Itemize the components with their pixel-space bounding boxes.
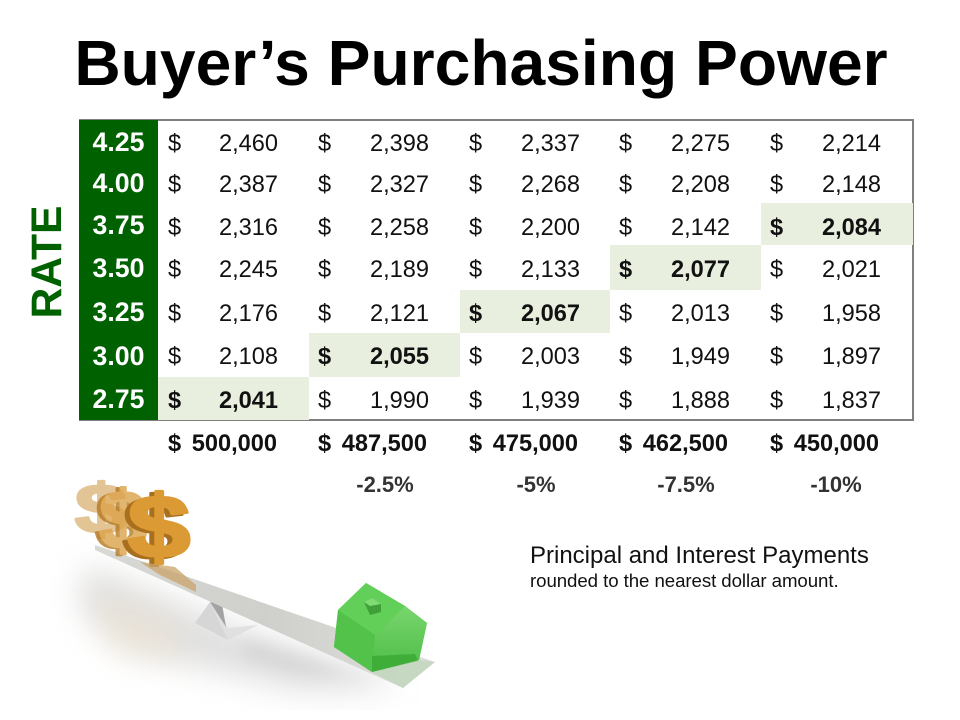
- row 3.00: 1,949: [671, 344, 730, 370]
- row 3.50: $: [469, 256, 482, 282]
- row 4.25: $: [619, 131, 632, 157]
- icon: green house: [334, 583, 435, 688]
- dollar reflection: [140, 562, 196, 592]
- row 4.25: $: [770, 131, 783, 157]
- row 3.00: 1,897: [822, 344, 881, 370]
- row 4.00: 2,387: [219, 172, 278, 198]
- row 4.00: $: [168, 172, 181, 198]
- row 3.50: $: [318, 256, 331, 282]
- home prices row: [168, 431, 879, 457]
- row 3.75: $: [168, 215, 181, 241]
- home prices row: 487,500: [342, 431, 427, 457]
- row 3.75: 2,200: [521, 215, 580, 241]
- row 4.25: $: [168, 131, 181, 157]
- icon: dollar signs: $: [128, 479, 190, 576]
- ground shadow: [80, 565, 400, 690]
- icon: dollar signs: $: [75, 470, 127, 548]
- row 3.50: 2,077: [671, 256, 730, 282]
- row 2.75: 1,990: [370, 388, 429, 414]
- row 4.25: 2,460: [219, 131, 278, 157]
- row 3.50: $: [770, 256, 783, 282]
- row 3.25: [79, 290, 881, 333]
- price change percentages: -10%: [810, 472, 862, 497]
- row 3.00: $: [168, 344, 181, 370]
- row 3.50: $: [619, 256, 632, 282]
- row 3.50: 2,021: [822, 256, 881, 282]
- row 3.50: 2,133: [521, 256, 580, 282]
- row 3.75: $: [469, 215, 482, 241]
- row 3.25: 1,958: [822, 300, 881, 326]
- row 3.75: $: [318, 215, 331, 241]
- home prices row: $: [469, 431, 482, 457]
- row 3.00: [79, 333, 881, 377]
- illustration: scale with dollars and house: [72, 470, 435, 700]
- row 3.75: 2,258: [370, 215, 429, 241]
- row 3.00: 3.00: [93, 340, 144, 370]
- note: principal and interest: [530, 542, 869, 591]
- row 4.00: $: [619, 172, 632, 198]
- row 4.00: 2,268: [521, 172, 580, 198]
- row 3.00: 2,108: [219, 344, 278, 370]
- row 3.00: 2,055: [370, 344, 429, 370]
- row 3.50: [79, 245, 881, 290]
- home prices row: $: [770, 431, 783, 457]
- home prices row: $: [619, 431, 632, 457]
- row 4.25: $: [469, 131, 482, 157]
- row 4.25: $: [318, 131, 331, 157]
- row 4.00: 2,327: [370, 172, 429, 198]
- row 3.00: $: [619, 344, 632, 370]
- row 3.25: $: [469, 300, 482, 326]
- row 4.25: [79, 120, 881, 162]
- note: principal and interest: Principal and Interest Payments: [530, 542, 869, 569]
- price change percentages: -2.5%: [356, 472, 414, 497]
- row 4.25: 2,275: [671, 131, 730, 157]
- row 3.75: $: [770, 215, 783, 241]
- row 4.00: $: [770, 172, 783, 198]
- row 3.25: $: [770, 300, 783, 326]
- row 3.00: $: [469, 344, 482, 370]
- row 4.25: 4.25: [93, 126, 144, 156]
- row 3.25: 2,176: [219, 300, 278, 326]
- icon: dollar signs: $: [123, 481, 185, 578]
- row 2.75: $: [770, 388, 783, 414]
- row 2.75: $: [469, 388, 482, 414]
- row 3.25: $: [318, 300, 331, 326]
- row 4.00: $: [318, 172, 331, 198]
- row 4.00: [79, 162, 881, 203]
- row 4.00: 2,208: [671, 172, 730, 198]
- icon: dollar signs: [75, 470, 190, 578]
- table borders: [79, 119, 914, 421]
- row 3.50: 3.50: [93, 253, 144, 283]
- row 2.75: 1,888: [671, 388, 730, 414]
- axis label: RATE: RATE: [23, 205, 71, 319]
- row 4.00: 4.00: [93, 168, 144, 198]
- row 3.50: 2,245: [219, 256, 278, 282]
- icon: dollar signs: $: [99, 474, 147, 566]
- price change percentages: [356, 472, 862, 497]
- row 3.75: 3.75: [93, 210, 144, 240]
- price change percentages: -7.5%: [657, 472, 715, 497]
- row 3.75: 2,084: [822, 215, 881, 241]
- plank: [95, 545, 435, 688]
- row 3.75: 2,142: [671, 215, 730, 241]
- row 3.25: 2,067: [521, 300, 580, 326]
- icon: dollar signs: $: [95, 475, 143, 567]
- row 3.25: 3.25: [93, 297, 144, 327]
- row 3.50: $: [168, 256, 181, 282]
- title: Buyer’s Purchasing Power: [74, 27, 888, 99]
- row 4.25: 2,337: [521, 131, 580, 157]
- row 3.75: [79, 203, 913, 245]
- row 3.25: $: [168, 300, 181, 326]
- home prices row: $: [168, 431, 181, 457]
- home prices row: 475,000: [493, 431, 578, 457]
- row 4.25: 2,398: [370, 131, 429, 157]
- row 3.00: $: [770, 344, 783, 370]
- note: principal and interest: rounded to the nearest dollar amount.: [530, 570, 839, 591]
- row 3.75: 2,316: [219, 215, 278, 241]
- row 2.75: 1,939: [521, 388, 580, 414]
- row 2.75: 1,837: [822, 388, 881, 414]
- row 4.00: 2,148: [822, 172, 881, 198]
- home prices row: 500,000: [192, 431, 277, 457]
- row 3.50: 2,189: [370, 256, 429, 282]
- price change percentages: -5%: [516, 472, 556, 497]
- row 3.25: 2,121: [370, 300, 429, 326]
- row 4.00: $: [469, 172, 482, 198]
- pedestal: [195, 602, 258, 640]
- row 2.75: 2,041: [219, 388, 278, 414]
- row 3.25: $: [619, 300, 632, 326]
- row 3.25: 2,013: [671, 300, 730, 326]
- row 4.25: 2,214: [822, 131, 881, 157]
- row 2.75: [79, 377, 881, 420]
- row 2.75: $: [619, 388, 632, 414]
- home prices row: $: [318, 431, 331, 457]
- row 3.75: $: [619, 215, 632, 241]
- row 3.00: $: [318, 344, 331, 370]
- row 2.75: 2.75: [93, 384, 144, 414]
- row 2.75: $: [318, 388, 331, 414]
- row 3.00: 2,003: [521, 344, 580, 370]
- row 2.75: $: [168, 388, 181, 414]
- home prices row: 450,000: [794, 431, 879, 457]
- home prices row: 462,500: [643, 431, 728, 457]
